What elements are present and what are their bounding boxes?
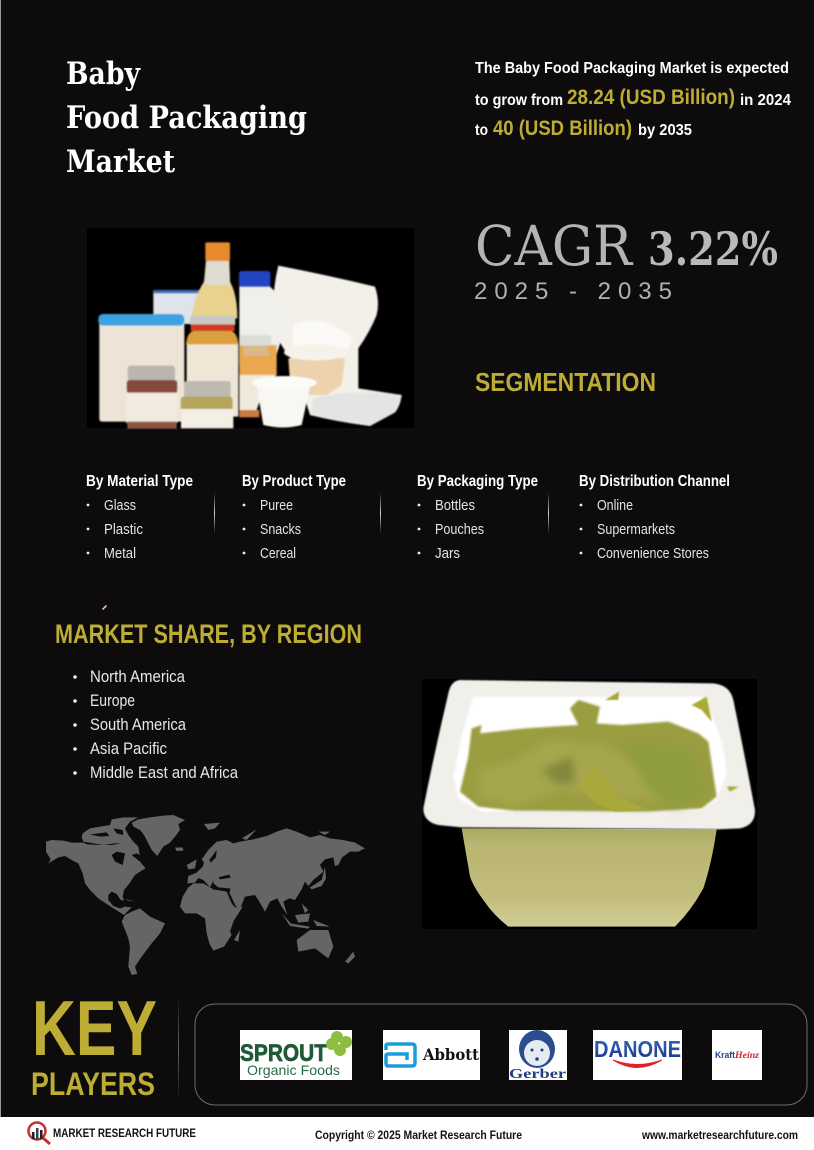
segment: by product type: Puree xyxy=(260,497,293,514)
market forecast text xyxy=(475,60,791,140)
segment: by packaging type: Bottles xyxy=(435,497,475,514)
segment: by product type: Cereal xyxy=(260,545,296,562)
image: baby food containers xyxy=(87,228,414,429)
market forecast text: to grow from xyxy=(475,92,563,109)
segment: by distribution channel: By Distribution Channel xyxy=(579,473,730,490)
segment: by product type: Snacks xyxy=(260,521,301,538)
market forecast text: in 2024 xyxy=(740,92,791,109)
panel: key player logos xyxy=(195,1004,807,1105)
logo: Danone xyxy=(593,1030,682,1080)
footer: MARKET RESEARCH FUTURE xyxy=(53,1126,196,1140)
region list: North America xyxy=(90,667,185,686)
logo: Sprout Organic Foods: Organic Foods xyxy=(247,1062,340,1078)
CAGR figure: 2025 - 2035 xyxy=(474,278,672,305)
title: Baby xyxy=(66,56,141,92)
segment: by distribution channel xyxy=(579,473,730,562)
segment: by material type xyxy=(86,473,193,562)
region list: South America xyxy=(90,715,186,734)
logo: Danone: DANONE xyxy=(594,1036,681,1062)
region list: Europe xyxy=(90,691,135,710)
logo: Kraft Heinz: Kraft xyxy=(715,1050,735,1060)
segment: by distribution channel: Supermarkets xyxy=(597,521,675,538)
logo: Abbott: Abbott xyxy=(422,1045,480,1064)
segment: by packaging type: Jars xyxy=(435,545,460,562)
region list xyxy=(73,667,238,782)
logo: Gerber xyxy=(509,1030,567,1082)
segment: by distribution channel: Online xyxy=(597,497,633,514)
heading: key players: PLAYERS xyxy=(31,1066,155,1102)
logo: Sprout Organic Foods: SPROUT xyxy=(240,1040,327,1067)
logo: Abbott xyxy=(383,1030,480,1080)
heading: key players: KEY xyxy=(32,984,157,1072)
segment: by material type: By Material Type xyxy=(86,473,193,490)
segment: by material type: Metal xyxy=(104,545,136,562)
icon: market research future logo xyxy=(28,1122,50,1144)
title: Food Packaging xyxy=(66,100,307,136)
segment: by distribution channel: Convenience Stores xyxy=(597,545,709,562)
market forecast text: to xyxy=(475,122,488,139)
market forecast text: 40 (USD Billion) xyxy=(493,117,632,140)
logo: Gerber: Gerber xyxy=(509,1067,566,1082)
segment: by packaging type: By Packaging Type xyxy=(417,473,538,490)
CAGR figure: 3.22% xyxy=(648,222,778,276)
market forecast text: by 2035 xyxy=(638,122,692,139)
logo: Sprout Organic Foods xyxy=(240,1030,352,1080)
heading: market share by region: MARKET SHARE, BY REGION xyxy=(55,619,362,649)
title xyxy=(66,56,307,180)
CAGR figure xyxy=(474,214,778,305)
logo: Kraft Heinz xyxy=(712,1030,762,1080)
market forecast text: 28.24 (USD Billion) xyxy=(567,86,735,109)
market forecast text: The Baby Food Packaging Market is expected xyxy=(475,60,789,77)
segment: by product type xyxy=(242,473,346,562)
heading: key players xyxy=(31,984,157,1102)
footer: Copyright © 2025 Market Research Future xyxy=(315,1128,522,1142)
CAGR figure: CAGR xyxy=(475,214,633,278)
heading: segmentation: SEGMENTATION xyxy=(475,367,656,397)
segment: by material type: Glass xyxy=(104,497,136,514)
segment: by product type: By Product Type xyxy=(242,473,346,490)
segment: by packaging type: Pouches xyxy=(435,521,484,538)
title: Market xyxy=(66,144,176,180)
logo: Kraft Heinz: Heinz xyxy=(734,1050,760,1060)
segment: by material type: Plastic xyxy=(104,521,143,538)
footer xyxy=(0,1117,814,1150)
region list: Asia Pacific xyxy=(90,739,167,758)
segment: by packaging type xyxy=(417,473,538,562)
image: puree in plastic tub xyxy=(422,679,757,929)
region list: Middle East and Africa xyxy=(90,763,238,782)
world map xyxy=(46,815,365,975)
